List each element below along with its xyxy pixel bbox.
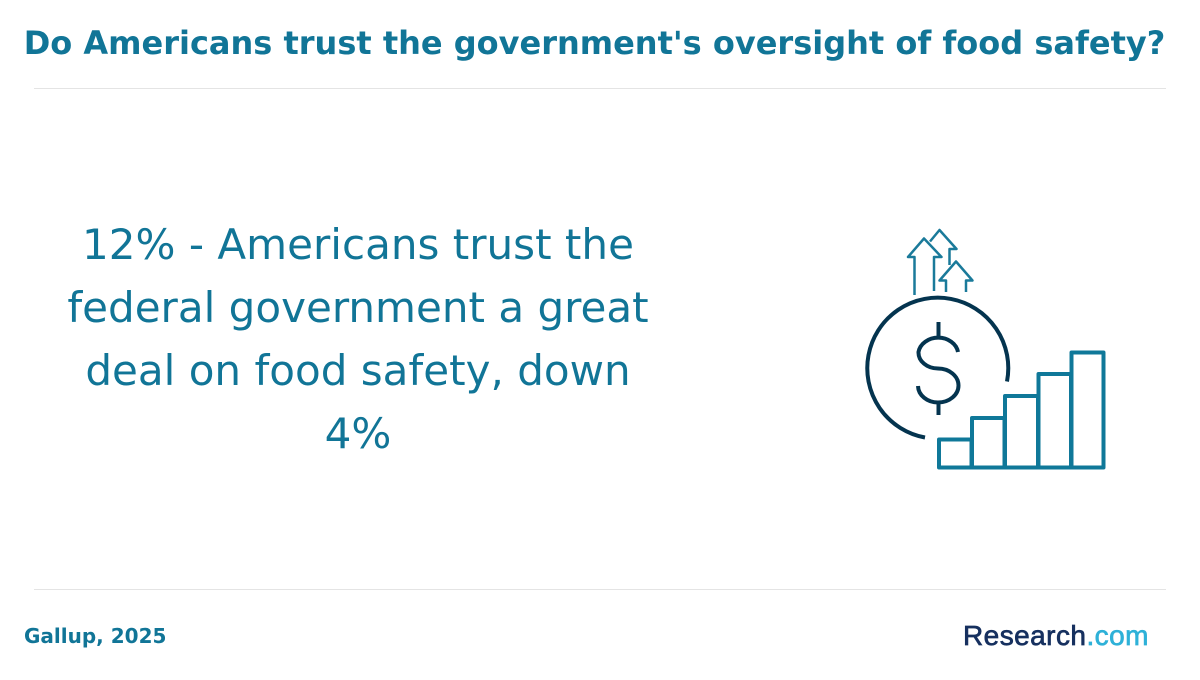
- main statistic text: deal on food safety, down: [85, 346, 631, 395]
- main statistic text: 12% - Americans trust the: [82, 220, 634, 269]
- icon: dollar coin: [867, 298, 1008, 438]
- main statistic text: [67, 220, 649, 458]
- main statistic text: 4%: [325, 409, 391, 458]
- icon: money growth with bars and arrows: [865, 228, 1106, 470]
- logo: Research.com: Research.com: [963, 620, 1149, 651]
- main statistic text: federal government a great: [67, 283, 649, 332]
- source: Gallup, 2025: [24, 624, 166, 648]
- icon: upward arrows: [908, 230, 972, 295]
- icon: bar chart: [939, 352, 1104, 468]
- title: Do Americans trust the government's oversight of food safety?: [24, 24, 1165, 62]
